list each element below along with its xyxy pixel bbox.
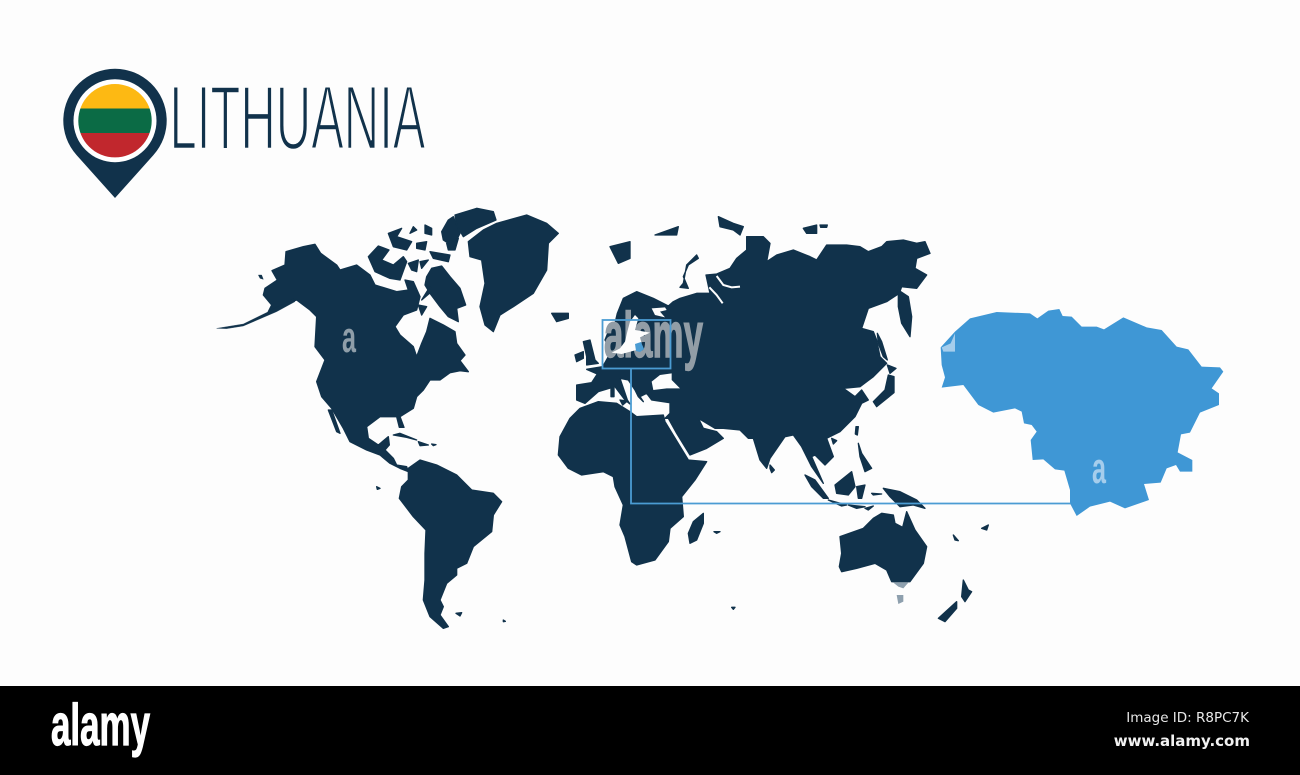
- watermark: alamy over map: alamy: [604, 299, 703, 371]
- panel: Lithuania enlarged map: [941, 309, 1223, 516]
- logo: alamy: alamy: [51, 693, 150, 758]
- map: Eurasia: [552, 217, 930, 483]
- website: www.alamy.com: [1114, 732, 1250, 750]
- world map: [217, 208, 988, 628]
- watermark: letter a on North America: a: [342, 313, 356, 362]
- watermark: letter a on Lithuania: a: [1092, 444, 1106, 493]
- icon: location pin with Lithuanian flag: [63, 69, 167, 198]
- title: LITHUANIA: [170, 68, 426, 169]
- map: Lithuania marker on world map: [635, 342, 644, 352]
- image id: Image ID: R8PC7K: [1126, 710, 1250, 726]
- map: North America and Greenland: [217, 208, 558, 472]
- map: Africa and Oceania: [558, 402, 988, 622]
- map: seas cut out of Europe and Russia: [612, 276, 740, 390]
- locator frame and leader line: [602, 320, 1071, 504]
- footer band: [0, 686, 1300, 775]
- map: Central and South America: [377, 433, 505, 628]
